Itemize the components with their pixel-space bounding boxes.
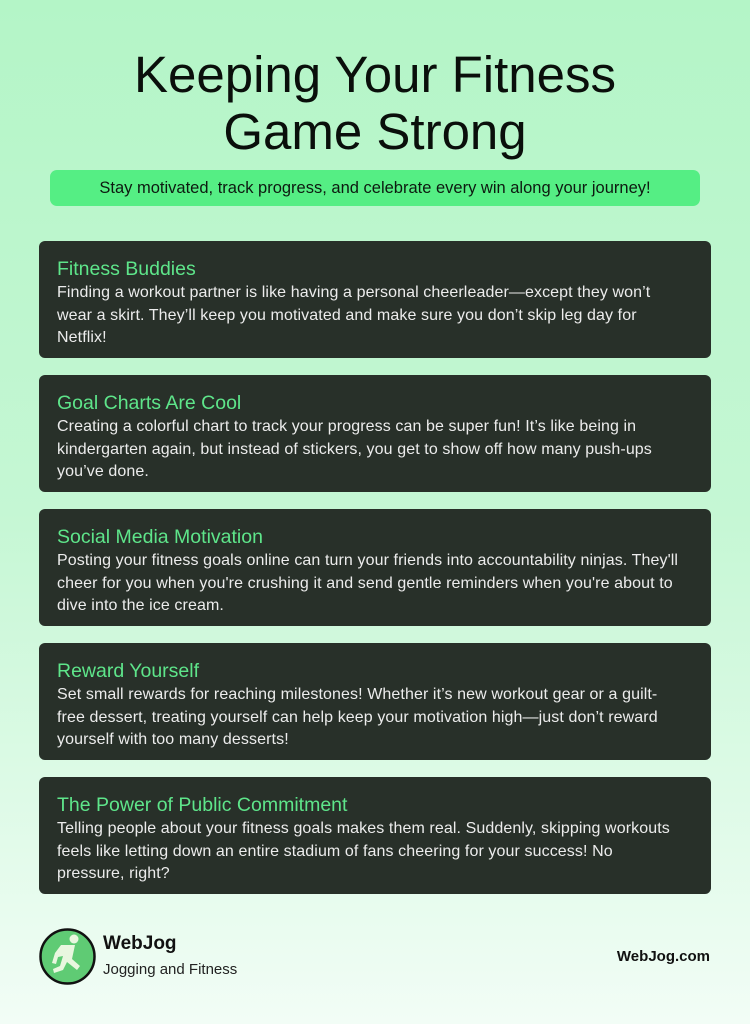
title [134, 46, 616, 160]
panel: fitness buddies: Fitness Buddies [57, 258, 196, 280]
brand text: Jogging and Fitness [103, 961, 237, 978]
subtitle pill [50, 170, 700, 206]
panel: goal charts: Goal Charts Are Cool [57, 392, 241, 414]
icon: logo runner [39, 928, 96, 985]
panel: fitness buddies: Finding a workout partner is like having a personal cheerleader—except they won’t wear a skirt. They’ll keep you motivated and make sure you don’t skip leg day for Netflix! [57, 284, 650, 346]
panel: goal charts: Creating a colorful chart to track your progress can be super fun! It’s like being in kindergarten again, but instead of stickers, you get to show off how many push-ups you’ve done. [57, 418, 652, 480]
panel: reward yourself: Reward Yourself [57, 660, 199, 682]
panel: reward yourself [39, 643, 711, 760]
panel: social media: Social Media Motivation [57, 526, 263, 548]
brand text: WebJog [103, 933, 177, 954]
panel: goal charts [39, 375, 711, 492]
panel: reward yourself: Set small rewards for reaching milestones! Whether it’s new workout gear or a guilt-free dessert, treating yourself can help keep your motivation high—just don’t reward yourself with too many desserts! [57, 686, 658, 748]
panel: social media: Posting your fitness goals online can turn your friends into accountability ninjas. They'll cheer for you when you're crushing it and send gentle reminders when you're about to dive into the ice cream. [57, 552, 678, 614]
url: WebJog.com [617, 948, 710, 965]
panel: public commitment [39, 777, 711, 894]
panel: fitness buddies [39, 241, 711, 358]
panel: social media [39, 509, 711, 626]
brand text [103, 933, 237, 978]
title: Game Strong [223, 103, 527, 160]
title: Keeping Your Fitness [134, 46, 616, 103]
panel: public commitment: The Power of Public Commitment [57, 794, 347, 816]
subtitle pill: Stay motivated, track progress, and celebrate every win along your journey! [99, 179, 651, 197]
panel: public commitment: Telling people about your fitness goals makes them real. Suddenly, skipping workouts feels like letting down an entire stadium of fans cheering for your success! No pressure, right? [57, 820, 670, 882]
